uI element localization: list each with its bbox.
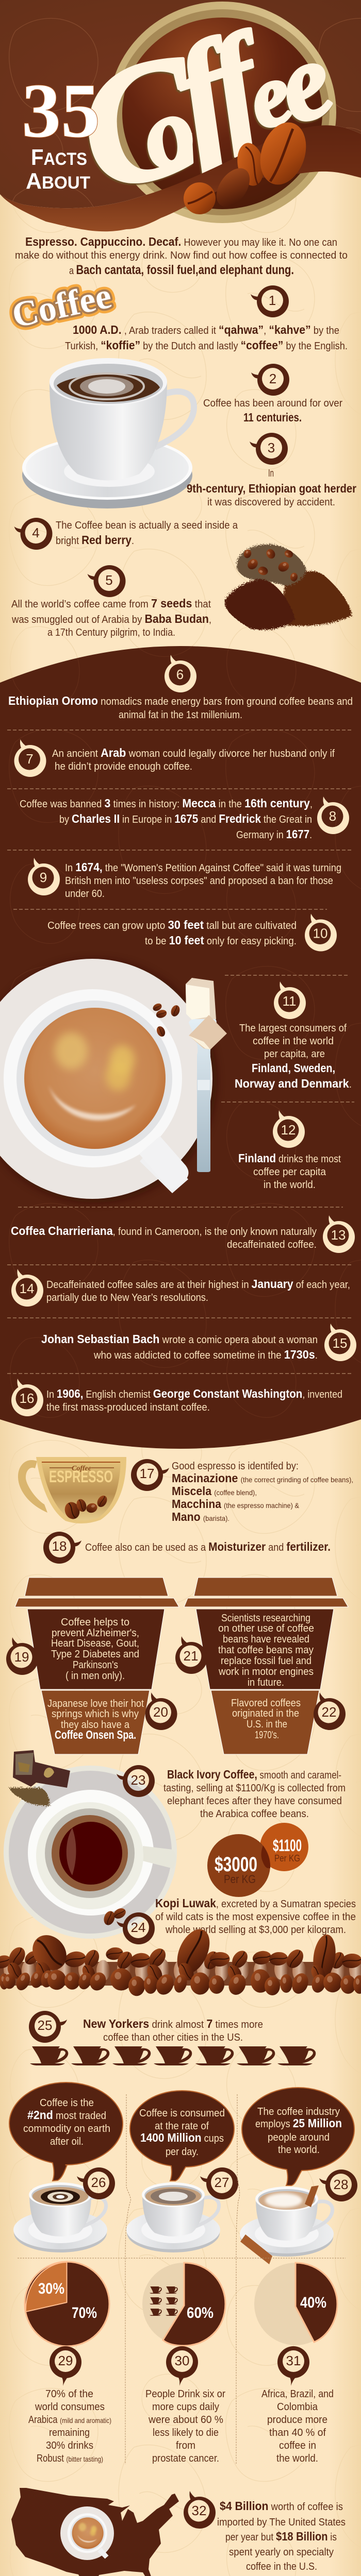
title word: Coffee bbox=[61, 5, 348, 227]
fact 30 text: less likely to die bbox=[153, 2427, 219, 2438]
badge 23 bbox=[117, 1765, 155, 1797]
price bubbles: $3000 bbox=[215, 1853, 257, 1876]
fact 11 text: coffee in the world bbox=[253, 1036, 334, 1047]
fact 2 text bbox=[203, 398, 342, 424]
fact 31 text: the world. bbox=[276, 2453, 318, 2464]
fact 32 text: coffee in the U.S. bbox=[246, 2561, 317, 2572]
badge 19: 19 bbox=[14, 1649, 29, 1665]
badge 21: 21 bbox=[184, 1648, 198, 1664]
fact 16 text bbox=[46, 1387, 342, 1413]
fact 13 text: decaffeinated coffee. bbox=[227, 1239, 317, 1250]
fact 19 text: Heart Disease, Gout, bbox=[51, 1638, 139, 1649]
badge 13: 13 bbox=[331, 1227, 346, 1243]
title word: Coffee: o bbox=[128, 74, 208, 192]
badge 8: 8 bbox=[329, 808, 336, 824]
fact 28 text: The coffee industry bbox=[257, 2106, 340, 2117]
badge 6 bbox=[165, 655, 196, 692]
fact 17 text: Mano (barista). bbox=[172, 1510, 229, 1523]
fact 18 text: Coffee also can be used as a Moisturizer and fertilizer. bbox=[85, 1540, 331, 1553]
fact 19 text: Coffee helps to bbox=[61, 1617, 129, 1628]
badge 31: 31 bbox=[286, 2353, 301, 2368]
badge 13 bbox=[323, 1215, 355, 1253]
fact 31 text: coffee in bbox=[279, 2440, 316, 2451]
fact 4 text bbox=[56, 520, 238, 547]
fact 31 text: than 40 % of bbox=[269, 2427, 326, 2438]
fact 21 text: beans have revealed bbox=[223, 1634, 309, 1645]
fact 12 text: in the world. bbox=[264, 1179, 316, 1191]
fact 30 text: prostate cancer. bbox=[152, 2453, 219, 2464]
badge 29: 29 bbox=[58, 2353, 73, 2368]
header ribbon bbox=[0, 125, 361, 231]
badge 4: 4 bbox=[32, 525, 40, 540]
badge 8 bbox=[317, 796, 349, 834]
fact 9 text bbox=[65, 860, 341, 900]
fact 21 text bbox=[218, 1613, 314, 1688]
title word: Coffee: C bbox=[61, 16, 220, 227]
fact 29 text: world consumes bbox=[35, 2401, 105, 2413]
illustration: cup 27 bbox=[126, 2182, 220, 2252]
fact 31 text: produce more bbox=[267, 2414, 327, 2426]
badge 28 bbox=[319, 2170, 357, 2201]
fact 29 text: 70% of the bbox=[45, 2388, 93, 2400]
fact 7 text: he didn’t provide enough coffee. bbox=[55, 761, 192, 772]
fact 3 text bbox=[187, 468, 356, 508]
badge 18 bbox=[43, 1532, 81, 1564]
right paper cup bbox=[184, 1578, 348, 1754]
illustration: cup 26 bbox=[13, 2182, 107, 2252]
fact 1 text: 1000 A.D. , Arab traders called it “qahwa”, “kahve” by the bbox=[73, 323, 339, 336]
seven cup icons bbox=[30, 2046, 316, 2065]
illustration: coffee bag and scattered beans bbox=[9, 1750, 70, 1806]
fact 32 text bbox=[217, 2499, 346, 2572]
title number 35: 35 bbox=[22, 68, 100, 154]
fact 17 text bbox=[172, 1461, 353, 1523]
badge 30 bbox=[166, 2346, 198, 2386]
badge 25 bbox=[29, 2011, 67, 2043]
pie chart 29: 30% bbox=[38, 2280, 64, 2297]
fact 27 text: per day. bbox=[166, 2146, 199, 2158]
fact 21 text: Scientists researching bbox=[221, 1613, 310, 1624]
pie chart 29 bbox=[25, 2262, 109, 2346]
badge 6: 6 bbox=[176, 667, 184, 682]
header coffee beans bbox=[184, 116, 314, 214]
fact 23 text bbox=[163, 1768, 346, 1820]
fact 24 text bbox=[155, 1896, 356, 1936]
fact 26 text: Coffee is the bbox=[40, 2097, 94, 2109]
badge 27: 27 bbox=[215, 2175, 229, 2190]
fact 17 text: Good espresso is identifed by: bbox=[172, 1461, 299, 1472]
fact 28 text: employs 25 Million bbox=[255, 2116, 342, 2130]
fact 20 text: Coffee Onsen Spa. bbox=[55, 1728, 136, 1741]
fact 20 text: they also have a bbox=[61, 1719, 130, 1731]
speech bubble 28 bbox=[242, 2088, 354, 2185]
badge 28: 28 bbox=[334, 2177, 348, 2192]
intro text: a Bach cantata, fossil fuel,and elephant dung. bbox=[69, 263, 294, 277]
coffee sticker logo: Coffee bbox=[9, 276, 115, 335]
badge 32 bbox=[184, 2491, 216, 2529]
pie chart 29: 70% bbox=[72, 2304, 97, 2321]
fact 21 text: on other use of coffee bbox=[218, 1623, 314, 1634]
fact 11 text: per capita, are bbox=[264, 1048, 325, 1060]
price bubbles bbox=[207, 1823, 308, 1897]
fact 26 text bbox=[23, 2097, 110, 2147]
fact 20 text bbox=[47, 1698, 144, 1741]
fact 27 text: at the rate of bbox=[155, 2121, 209, 2132]
fact 11 text bbox=[235, 1023, 352, 1090]
fact 5 text bbox=[11, 597, 211, 638]
fact 6 text: animal fat in the 1st millenium. bbox=[119, 709, 242, 721]
fact 5 text: a 17th Century pilgrim, to India. bbox=[47, 627, 175, 638]
badge 21 bbox=[175, 1636, 207, 1674]
pie chart 30: 60% bbox=[187, 2304, 214, 2321]
badge 12: 12 bbox=[281, 1122, 296, 1138]
fact 24 text: whole world selling at $3,000 per kilogram. bbox=[165, 1924, 346, 1936]
badge 1 bbox=[251, 285, 289, 317]
badge 17: 17 bbox=[140, 1466, 154, 1481]
badge 11: 11 bbox=[283, 993, 296, 1009]
badge 3 bbox=[250, 433, 288, 465]
price bubbles: Per KG bbox=[224, 1873, 256, 1886]
fact 25 text bbox=[83, 2017, 263, 2043]
fact 25 text: New Yorkers drink almost 7 times more bbox=[83, 2017, 263, 2030]
illustration: espresso cup: ESPRESSO bbox=[49, 1467, 113, 1486]
fact 30 text: were about 60 % bbox=[148, 2414, 223, 2426]
map of the USA bbox=[11, 2488, 179, 2576]
fact 29 text: remaining bbox=[49, 2427, 90, 2438]
illustration: beans and ground coffee piles bbox=[225, 544, 352, 630]
fact 11 text: The largest consumers of bbox=[239, 1023, 347, 1034]
title word: Coffee: e bbox=[261, 18, 348, 147]
badge 3: 3 bbox=[268, 440, 275, 455]
badge 10 bbox=[305, 914, 337, 951]
badge 27 bbox=[200, 2167, 238, 2199]
fact 16 text: the first mass-produced instant coffee. bbox=[46, 1402, 210, 1413]
fact 32 text: $4 Billion worth of coffee is bbox=[220, 2499, 343, 2513]
fact 21 text: in future. bbox=[248, 1677, 284, 1688]
badge 4 bbox=[14, 518, 53, 550]
fact 30 text: from bbox=[176, 2440, 195, 2451]
price bubbles: Per KG bbox=[274, 1853, 300, 1863]
fact 28 text: the world. bbox=[278, 2144, 320, 2156]
fact 19 text bbox=[51, 1617, 139, 1682]
fact 30 text: People Drink six or bbox=[145, 2388, 225, 2400]
pie chart 31: 40% bbox=[300, 2294, 326, 2311]
badge 32: 32 bbox=[192, 2503, 206, 2518]
badge 15: 15 bbox=[333, 1335, 347, 1351]
badge 20: 20 bbox=[153, 1704, 168, 1720]
fact 15 text: who was addicted to coffee sometime in the 1730s. bbox=[93, 1348, 318, 1361]
badge 24: 24 bbox=[131, 1920, 145, 1935]
intro text bbox=[15, 235, 348, 277]
title word: Coffee: e bbox=[236, 44, 303, 148]
left paper cup bbox=[15, 1578, 179, 1754]
fact 21 text: replace fossil fuel and bbox=[221, 1655, 311, 1667]
fact 17 text: Macchina (the espresso machine) & bbox=[172, 1497, 300, 1511]
fact 22 text bbox=[231, 1698, 301, 1741]
fact 9 text: British men into "useless corpses" and proposed a ban for those bbox=[65, 875, 333, 887]
speech bubble 27 bbox=[130, 2091, 234, 2181]
coffee bean strip bbox=[0, 1924, 361, 1997]
fact 26 text: #2nd most traded bbox=[27, 2108, 106, 2122]
fact 32 text: per year but $18 Billion is bbox=[225, 2530, 337, 2543]
fact 19 text: Parkinson's bbox=[73, 1659, 118, 1671]
fact 5 text: All the world’s coffee came from 7 seeds that bbox=[11, 597, 211, 610]
fact 29 text: Arabica (mild and aromatic) bbox=[28, 2414, 111, 2426]
fact 4 text: bright Red berry. bbox=[56, 533, 134, 547]
badge 26: 26 bbox=[91, 2175, 106, 2190]
fact 3 text: it was discovered by accident. bbox=[207, 497, 335, 508]
fact 2 text: Coffee has been around for over bbox=[203, 398, 342, 409]
badge 14 bbox=[11, 1269, 43, 1307]
badge 2 bbox=[251, 364, 289, 396]
fact 10 text: Coffee trees can grow upto 30 feet tall but are cultivated bbox=[47, 918, 297, 931]
fact 5 text: was smuggled out of Arabia by Baba Budan, bbox=[11, 612, 211, 625]
fact 11 text: Finland, Sweden, bbox=[252, 1061, 335, 1075]
fact 12 text bbox=[238, 1151, 341, 1191]
dividers bbox=[7, 730, 354, 1374]
title: Facts: FACTS bbox=[31, 145, 87, 170]
fact 27 text: Coffee is consumed bbox=[139, 2108, 225, 2119]
badge 23: 23 bbox=[131, 1772, 145, 1788]
fact 3 text: In bbox=[268, 468, 274, 479]
badge 29 bbox=[50, 2346, 81, 2386]
fact 1 text bbox=[65, 323, 348, 352]
price bubbles: $1100 bbox=[273, 1836, 302, 1855]
fact 31 text: Colombia bbox=[277, 2401, 318, 2413]
fact 22 text: U.S. in the bbox=[247, 1719, 287, 1730]
fact 28 text: people around bbox=[268, 2132, 330, 2143]
badge 1: 1 bbox=[269, 293, 276, 308]
fact 29 text: Robust (bitter tasting) bbox=[37, 2453, 103, 2464]
fact 31 text bbox=[261, 2388, 334, 2464]
badge 14: 14 bbox=[20, 1281, 34, 1296]
fact 27 text: 1400 Million cups bbox=[140, 2131, 224, 2144]
fact 29 text bbox=[28, 2388, 111, 2464]
fact 20 text: springs which is why bbox=[52, 1708, 139, 1720]
badge 9: 9 bbox=[40, 870, 47, 885]
fact 12 text: coffee per capita bbox=[253, 1166, 326, 1178]
fact 14 text bbox=[46, 1277, 350, 1303]
title word: Coffee: f bbox=[156, 9, 260, 174]
fact 12 text: Finland drinks the most bbox=[238, 1151, 341, 1165]
intro text: make do without this energy drink. Now find out how coffee is connected to bbox=[15, 250, 348, 261]
fact 22 text: originated in the bbox=[232, 1708, 299, 1719]
illustration: white coffee cup on saucer bbox=[22, 358, 194, 509]
badge 5 bbox=[88, 565, 126, 597]
fact 9 text: under 60. bbox=[65, 888, 105, 900]
illustration: espresso cup bbox=[18, 1457, 126, 1523]
pie chart 31 bbox=[254, 2263, 337, 2345]
illustration: top view cup with spoon and sugar bbox=[0, 959, 227, 1202]
fact 22 text: Flavored coffees bbox=[231, 1698, 301, 1709]
fact 26 text: commodity on earth bbox=[23, 2123, 110, 2134]
badge 22: 22 bbox=[322, 1704, 336, 1720]
fact 8 text bbox=[20, 796, 313, 841]
badge 15 bbox=[324, 1324, 356, 1361]
fact 15 text bbox=[41, 1332, 318, 1361]
fact 23 text: elephant feces after they have consumed bbox=[167, 1795, 342, 1807]
fact 14 text: Decaffeinated coffee sales are at their highest in January of each year, bbox=[46, 1277, 350, 1291]
fact 16 text: In 1906, English chemist George Constant Washington, invented bbox=[46, 1387, 342, 1400]
fact 2 text: 11 centuries. bbox=[243, 411, 302, 424]
fact 24 text: of wild cats is the most expensive coffee in the bbox=[155, 1911, 356, 1923]
fact 10 text bbox=[47, 918, 297, 947]
fact 20 text: Japanese love their hot bbox=[47, 1698, 144, 1709]
fact 29 text: 30% drinks bbox=[46, 2440, 93, 2451]
header oval badge bbox=[108, 2, 336, 223]
header background bbox=[0, 0, 361, 208]
fact 31 text: Africa, Brazil, and bbox=[261, 2388, 334, 2400]
fact 17 text: Macinazione (the correct grinding of coffee beans), bbox=[172, 1471, 353, 1485]
badge 26 bbox=[77, 2167, 115, 2199]
fact 7 text bbox=[52, 746, 335, 772]
title: About: ABOUT bbox=[26, 168, 90, 194]
badge 5: 5 bbox=[105, 572, 113, 588]
badge 25: 25 bbox=[38, 2018, 52, 2033]
badge 16: 16 bbox=[20, 1391, 34, 1406]
badge 17 bbox=[131, 1459, 169, 1491]
fact 13 text bbox=[11, 1224, 317, 1250]
badge 2: 2 bbox=[269, 371, 276, 386]
fact 23 text: tasting, selling at $1100/Kg is collected from bbox=[163, 1783, 346, 1794]
illustration: cup 28 with cinnamon bbox=[240, 2185, 334, 2264]
fact 11 text: Norway and Denmark. bbox=[235, 1077, 352, 1090]
fact 23 text: Black Ivory Coffee, smooth and caramel- bbox=[167, 1768, 341, 1781]
grid dividers bbox=[18, 2094, 346, 2464]
fact 25 text: coffee than other cities in the US. bbox=[103, 2032, 243, 2043]
fact 30 text bbox=[145, 2388, 225, 2464]
badge 31 bbox=[277, 2346, 309, 2386]
fact 6 text bbox=[8, 694, 353, 721]
badge 16 bbox=[11, 1379, 43, 1416]
fact 17 text: Miscela (coffee blend), bbox=[172, 1484, 257, 1498]
fact 8 text: Germany in 1677. bbox=[236, 827, 312, 841]
fact 10 text: to be 10 feet only for easy picking. bbox=[145, 934, 297, 947]
fact 32 text: imported by The United States bbox=[217, 2517, 346, 2528]
fact 28 text bbox=[255, 2106, 342, 2156]
badge 22 bbox=[314, 1692, 346, 1730]
fact 13 text: Coffea Charrieriana, found in Cameroon, is the only known naturally bbox=[11, 1224, 317, 1238]
fact 27 text bbox=[139, 2108, 225, 2158]
fact 19 text: prevent Alzheimer's, bbox=[52, 1628, 139, 1639]
pie chart 30 bbox=[142, 2263, 225, 2346]
badge 7: 7 bbox=[26, 751, 34, 767]
badge 18: 18 bbox=[52, 1538, 67, 1554]
fact 7 text: An ancient Arab woman could legally divorce her husband only if bbox=[52, 746, 335, 759]
badge 7 bbox=[14, 739, 46, 777]
illustration: black coffee cup top view bbox=[4, 1766, 177, 1939]
fact 8 text: by Charles II in Europe in 1675 and Fredrick the Great in bbox=[59, 812, 312, 825]
badge 10: 10 bbox=[313, 925, 327, 941]
badge 20 bbox=[145, 1692, 177, 1730]
fact 19 text: ( in men only). bbox=[65, 1670, 125, 1682]
fact 22 text: 1970's. bbox=[255, 1730, 279, 1741]
coffee sticker logo: Coffee bbox=[9, 276, 115, 335]
fact 32 text: spent yearly on specialty bbox=[229, 2547, 334, 2558]
fact 14 text: partially due to New Year’s resolutions. bbox=[46, 1292, 208, 1303]
fact 23 text: the Arabica coffee beans. bbox=[200, 1808, 309, 1820]
badge 24 bbox=[117, 1912, 155, 1944]
badge 11 bbox=[274, 981, 306, 1019]
fact 30 text: more cups daily bbox=[152, 2401, 219, 2413]
fact 1 text: Turkish, “koffie” by the Dutch and lastly “coffee” by the English. bbox=[65, 338, 348, 352]
badge 19 bbox=[6, 1637, 38, 1675]
badge 9 bbox=[28, 858, 60, 895]
fact 21 text: work in motor engines bbox=[218, 1666, 314, 1677]
fact 19 text: Type 2 Diabetes and bbox=[51, 1649, 139, 1660]
fact 4 text: The Coffee bean is actually a seed inside a bbox=[56, 520, 238, 531]
title word: Coffee: f bbox=[192, 5, 287, 157]
fact 15 text: Johan Sebastian Bach wrote a comic opera about a woman bbox=[41, 1332, 318, 1346]
fact 21 text: that coffee beans may bbox=[218, 1645, 314, 1656]
illustration: espresso cup: Coffee bbox=[72, 1465, 91, 1472]
fact 8 text: Coffee was banned 3 times in history: Mecca in the 16th century, bbox=[20, 796, 313, 810]
fact 9 text: In 1674, the "Women's Petition Against Coffee" said it was turning bbox=[65, 860, 341, 874]
dark section background bbox=[0, 646, 361, 1449]
icon: cup on map bbox=[60, 2506, 114, 2560]
badge 30: 30 bbox=[175, 2353, 189, 2368]
fact 6 text: Ethiopian Oromo nomadics made energy bars from ground coffee beans and bbox=[8, 694, 353, 707]
icon: two beans on saucer bbox=[102, 1906, 127, 1927]
fact 26 text: after oil. bbox=[50, 2136, 84, 2147]
intro text: Espresso. Cappuccino. Decaf. However you may like it. No one can bbox=[25, 235, 337, 248]
badge 12 bbox=[273, 1110, 305, 1148]
speech bubble 26 bbox=[9, 2082, 123, 2181]
